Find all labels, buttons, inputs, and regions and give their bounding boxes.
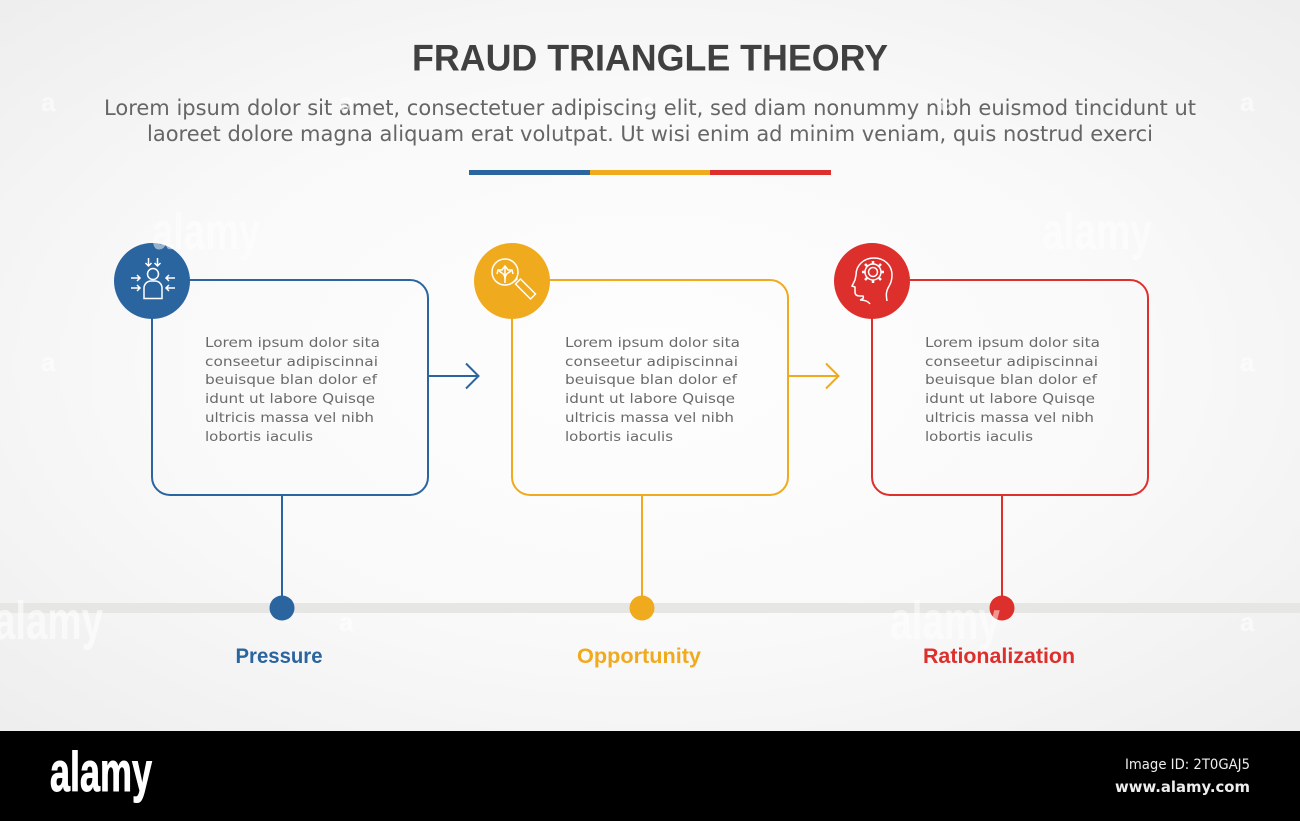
body text bbox=[205, 335, 380, 445]
body text: idunt ut labore Quisqe bbox=[205, 391, 375, 407]
body text: Lorem ipsum dolor sita bbox=[925, 335, 1100, 351]
panel: pressure bbox=[114, 243, 478, 668]
watermarks: alamy bbox=[1042, 203, 1152, 261]
body text: Lorem ipsum dolor sita bbox=[565, 335, 740, 351]
body text: conseetur adipiscinnai bbox=[565, 354, 738, 370]
timeline bar bbox=[0, 603, 1300, 613]
watermarks: a bbox=[940, 87, 955, 117]
footer url: www.alamy.com bbox=[1115, 778, 1250, 796]
watermarks bbox=[0, 87, 1255, 651]
body text: ultricis massa vel nibh bbox=[565, 410, 734, 426]
body text: conseetur adipiscinnai bbox=[925, 354, 1098, 370]
body text: idunt ut labore Quisqe bbox=[925, 391, 1095, 407]
watermarks: a bbox=[41, 347, 56, 377]
watermarks: alamy bbox=[890, 591, 1000, 651]
text box outline bbox=[872, 280, 1148, 495]
body text: beuisque blan dolor ef bbox=[925, 372, 1098, 388]
watermarks: a bbox=[1240, 607, 1255, 637]
body text bbox=[925, 335, 1100, 445]
label: Pressure bbox=[236, 645, 322, 668]
timeline dot bbox=[990, 596, 1014, 620]
connector stem bbox=[1001, 495, 1003, 600]
title divider bbox=[469, 170, 831, 175]
body text bbox=[565, 335, 740, 445]
body text: idunt ut labore Quisqe bbox=[565, 391, 735, 407]
body text: lobortis iaculis bbox=[565, 429, 673, 445]
subtitle: laoreet dolore magna aliquam erat volutpat. Ut wisi enim ad minim veniam, quis nostrud exerci bbox=[147, 122, 1153, 146]
subtitle: Lorem ipsum dolor sit amet, consectetuer adipiscing elit, sed diam nonummy nibh euismod tincidunt ut bbox=[104, 96, 1196, 120]
timeline dot bbox=[270, 596, 294, 620]
footer bar bbox=[0, 731, 1300, 821]
label: Opportunity bbox=[577, 645, 701, 668]
body text: Lorem ipsum dolor sita bbox=[205, 335, 380, 351]
body text: lobortis iaculis bbox=[925, 429, 1033, 445]
icon: head with gear bbox=[834, 243, 910, 319]
panel: rationalization bbox=[834, 243, 1148, 668]
icon: magnifier with arrows bbox=[474, 243, 550, 319]
watermarks: a bbox=[1240, 347, 1255, 377]
watermarks: a bbox=[1240, 87, 1255, 117]
body text: conseetur adipiscinnai bbox=[205, 354, 378, 370]
subtitle bbox=[104, 96, 1196, 146]
text box outline bbox=[512, 280, 788, 495]
watermarks: a bbox=[41, 87, 56, 117]
body text: beuisque blan dolor ef bbox=[565, 372, 738, 388]
body text: ultricis massa vel nibh bbox=[205, 410, 374, 426]
watermarks: alamy bbox=[152, 203, 260, 261]
text box outline bbox=[152, 280, 428, 495]
label: Rationalization bbox=[923, 645, 1075, 668]
connector stem bbox=[641, 495, 643, 600]
connector stem bbox=[281, 495, 283, 600]
body text: ultricis massa vel nibh bbox=[925, 410, 1094, 426]
title: FRAUD TRIANGLE THEORY bbox=[412, 38, 888, 78]
arrow bbox=[788, 364, 838, 388]
footer image id: Image ID: 2T0GAJ5 bbox=[1125, 757, 1250, 773]
watermarks: a bbox=[640, 87, 655, 117]
timeline dot bbox=[630, 596, 654, 620]
body text: beuisque blan dolor ef bbox=[205, 372, 378, 388]
watermarks: a bbox=[339, 607, 354, 637]
footer logo: alamy bbox=[50, 740, 152, 803]
icon: person under pressure bbox=[114, 243, 190, 319]
arrow bbox=[428, 364, 478, 388]
watermarks: a bbox=[339, 87, 354, 117]
body text: lobortis iaculis bbox=[205, 429, 313, 445]
panel: opportunity bbox=[474, 243, 838, 668]
